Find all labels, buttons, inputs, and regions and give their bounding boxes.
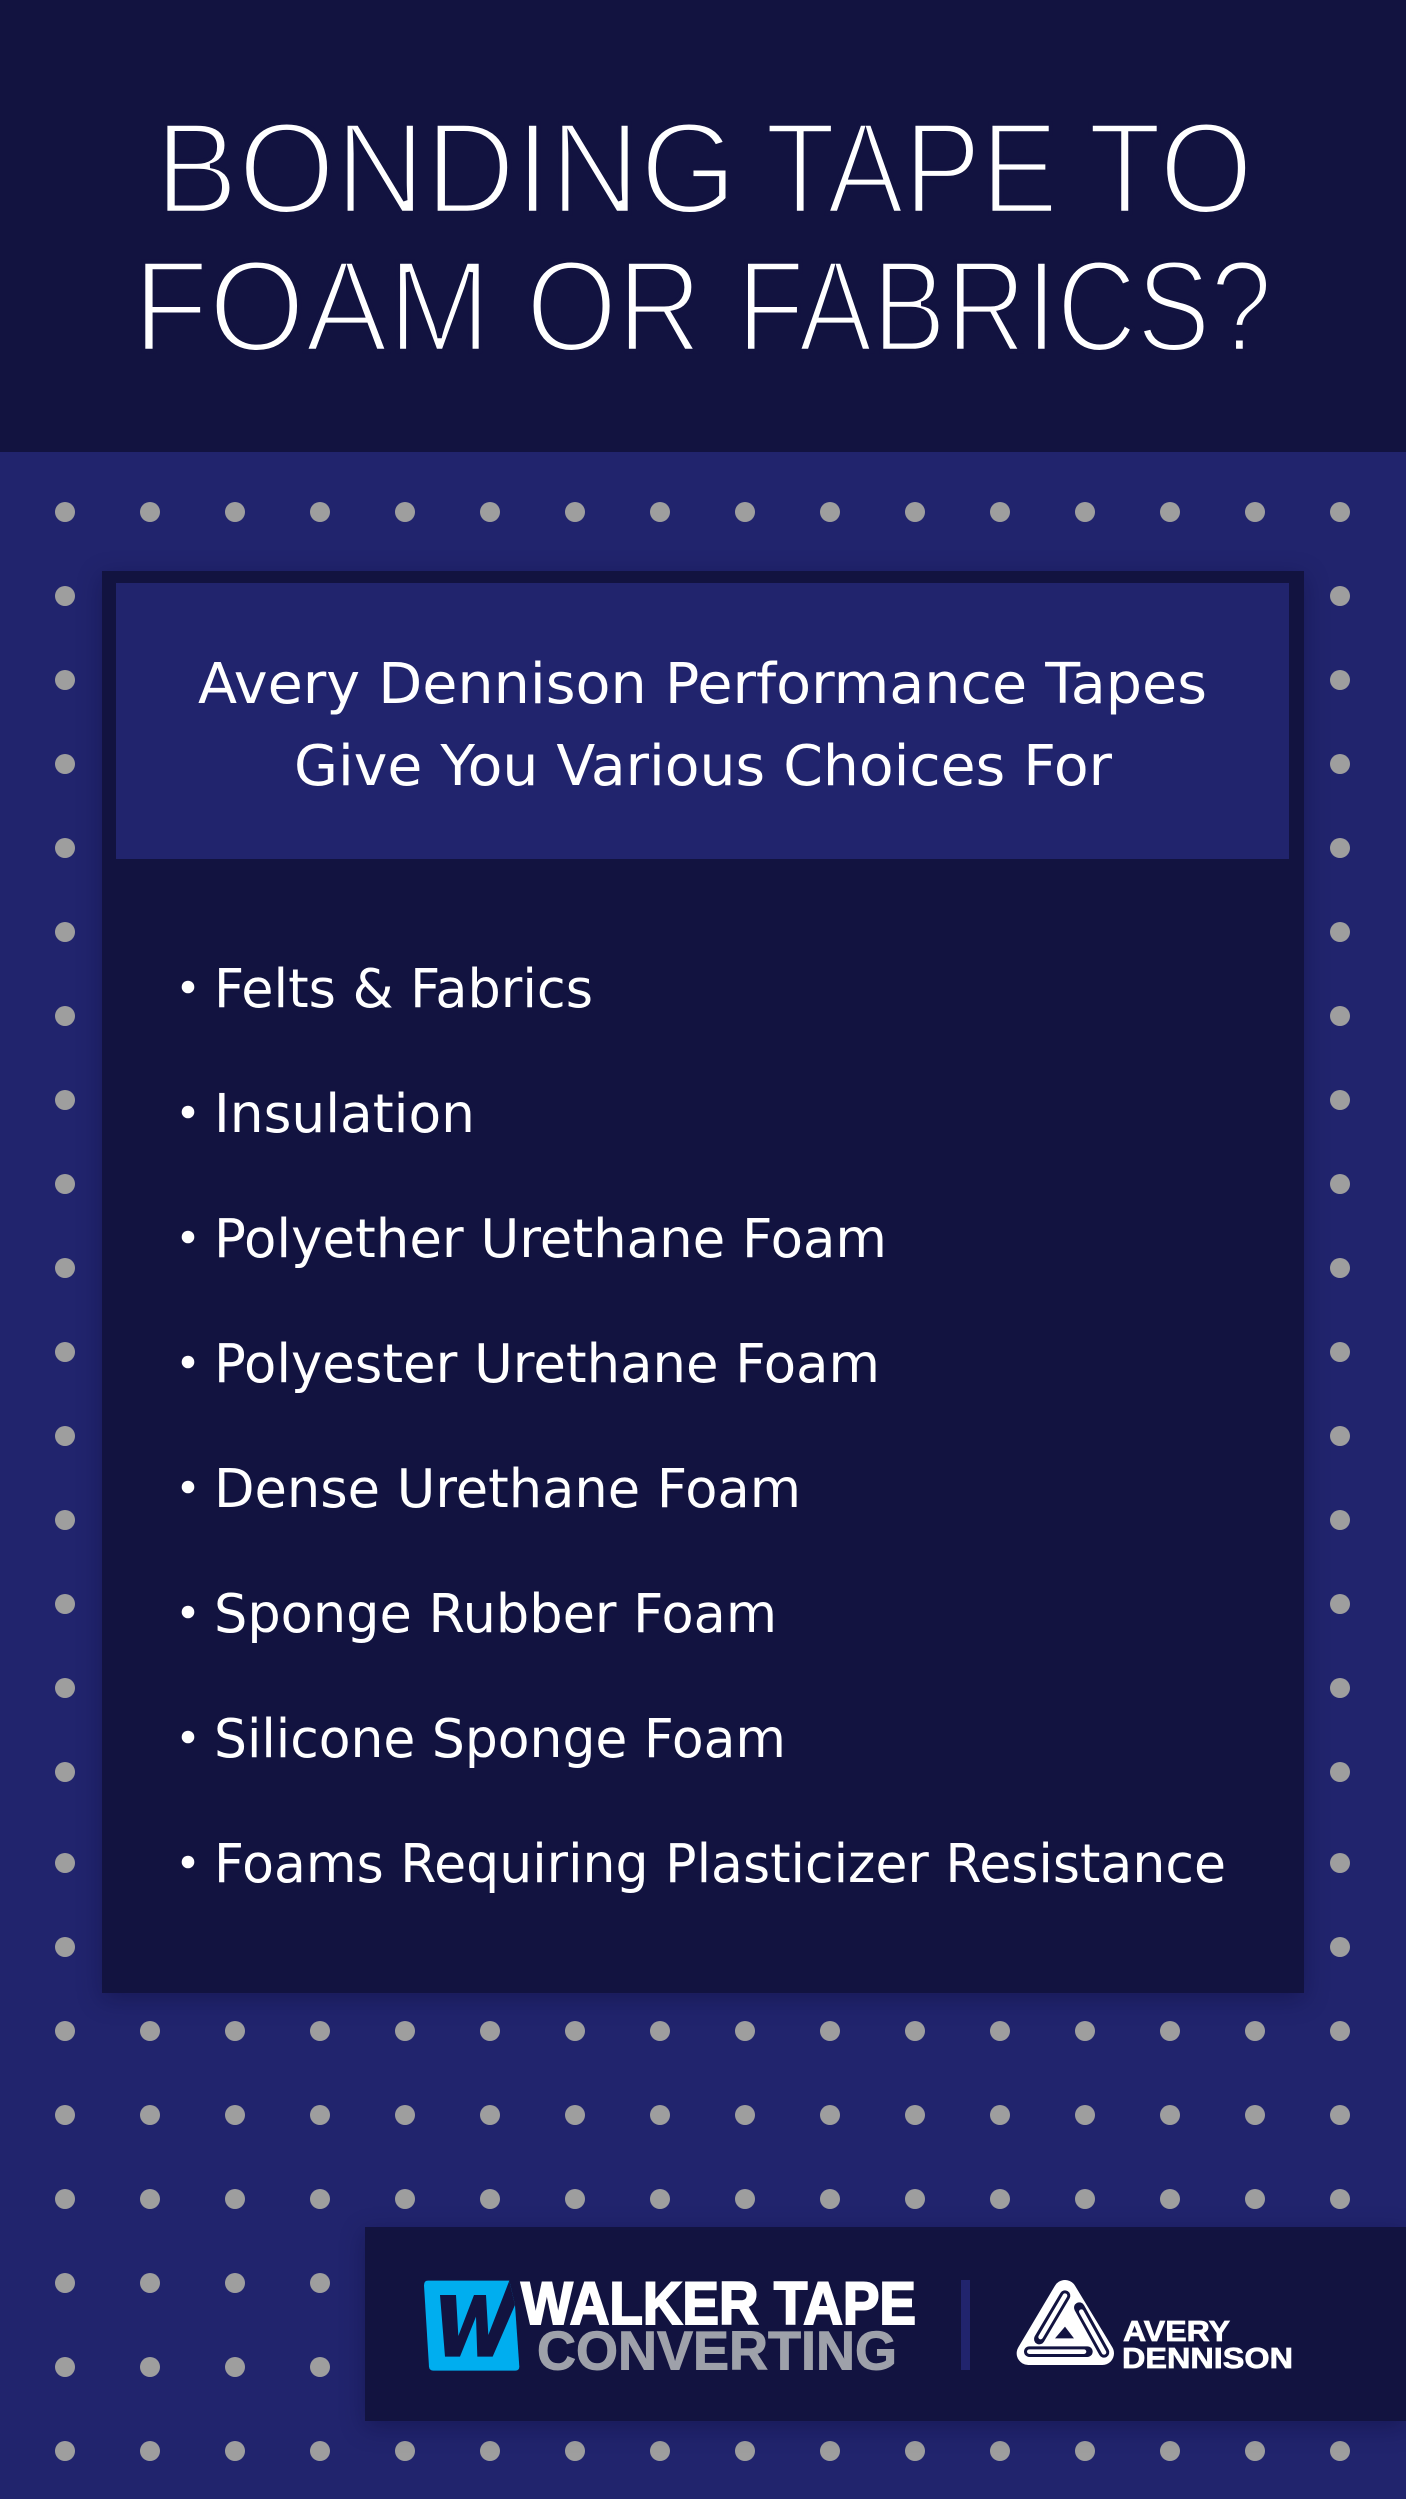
title: BONDING bbox=[155, 95, 737, 241]
logo divider bbox=[961, 2280, 970, 2370]
title: FABRICS? bbox=[737, 233, 1272, 379]
logo: Avery Dennison: AVERY bbox=[1123, 2316, 1230, 2348]
title bbox=[133, 95, 1272, 379]
header band bbox=[0, 0, 1406, 452]
title: OR bbox=[526, 233, 702, 379]
bulleted list of materials: Sponge Rubber Foam bbox=[214, 1582, 777, 1645]
footer logo panel bbox=[365, 2227, 1406, 2421]
subtitle bbox=[198, 652, 1207, 799]
bulleted list of materials: Polyether Urethane Foam bbox=[214, 1207, 887, 1270]
title: FOAM bbox=[133, 233, 491, 379]
icon: Walker W badge bbox=[424, 2281, 519, 2371]
bulleted list of materials bbox=[182, 957, 1226, 1895]
subtitle: Avery Dennison Performance Tapes bbox=[198, 652, 1207, 717]
logo: Avery Dennison: DENNISON bbox=[1122, 2343, 1293, 2375]
icon: Avery triangle mark bbox=[1028, 2292, 1104, 2353]
bulleted list of materials: Foams Requiring Plasticizer Resistance bbox=[214, 1832, 1226, 1895]
logo: Walker Tape Converting: CONVERTING bbox=[537, 2320, 897, 2382]
bulleted list of materials: Insulation bbox=[214, 1082, 475, 1145]
panel heading band bbox=[116, 583, 1289, 859]
bulleted list of materials: Felts & Fabrics bbox=[214, 957, 593, 1020]
logo: Walker Tape Converting bbox=[424, 2269, 916, 2382]
logo: Walker Tape Converting: WALKER TAPE bbox=[521, 2269, 916, 2337]
title: TO bbox=[1088, 95, 1253, 241]
bulleted list of materials: Silicone Sponge Foam bbox=[214, 1707, 786, 1770]
bulleted list of materials: Dense Urethane Foam bbox=[214, 1457, 801, 1520]
logo: Avery Dennison bbox=[1028, 2292, 1293, 2375]
subtitle: Give You Various Choices For bbox=[294, 734, 1113, 799]
panel: tape choices bbox=[102, 571, 1304, 1993]
title: TAPE bbox=[765, 95, 1058, 241]
bulleted list of materials: Polyester Urethane Foam bbox=[214, 1332, 880, 1395]
